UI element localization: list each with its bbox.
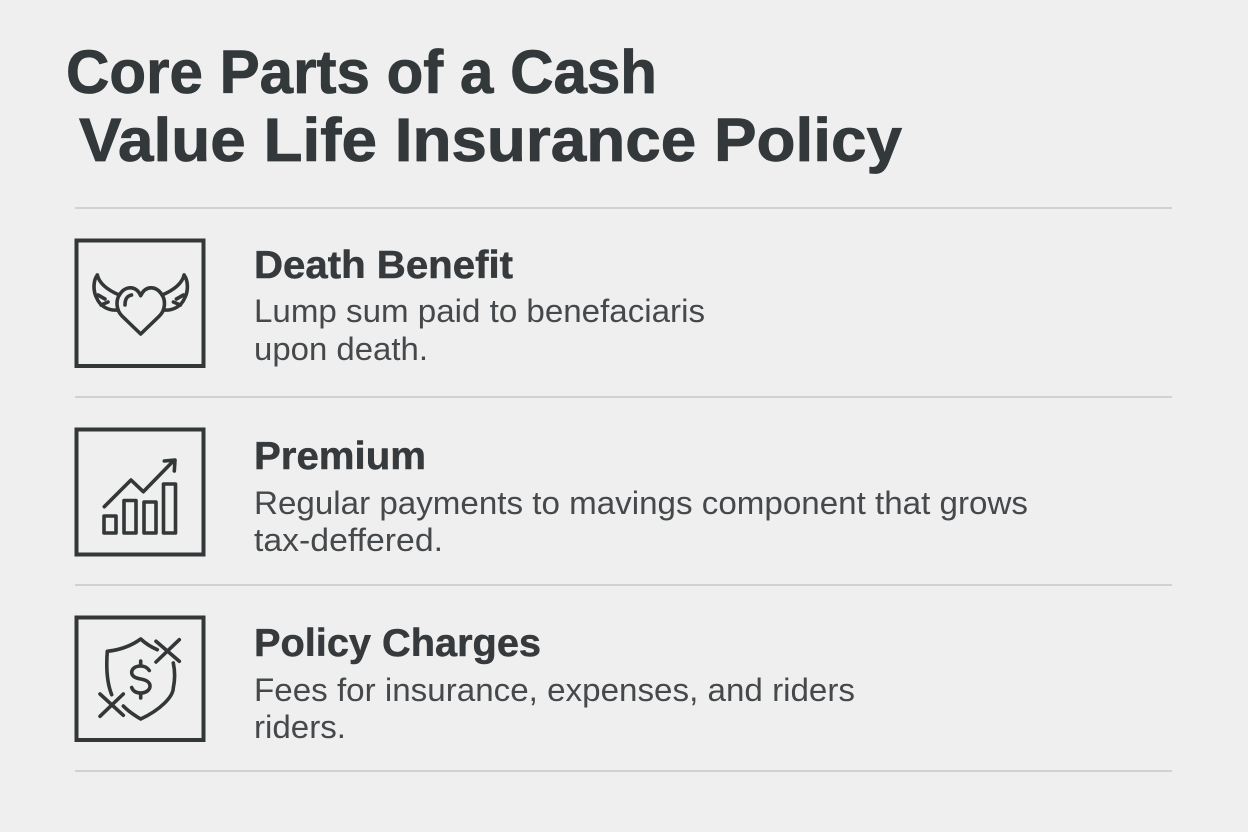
text: premium description: tax-deffered.: [254, 522, 443, 558]
title: Core Parts of a Cash: [66, 38, 657, 106]
text: policy charges description: riders.: [254, 709, 346, 745]
text: death benefit description: [254, 293, 705, 367]
panel: policy charges: [76, 618, 855, 745]
heading: death benefit: Death Benefit: [254, 244, 513, 287]
panel: death benefit: [76, 240, 705, 367]
text: policy charges description: Fees for insurance, expenses, and riders: [254, 672, 855, 708]
icon: winged heart: [76, 240, 204, 366]
heading: premium: Premium: [254, 435, 426, 478]
text: premium description: [254, 485, 1028, 558]
text: policy charges description: [254, 672, 855, 745]
title: Value Life Insurance Policy: [79, 106, 902, 174]
text: death benefit description: upon death.: [254, 331, 428, 367]
text: death benefit description: Lump sum paid to benefaciaris: [254, 293, 705, 329]
icon: growth chart: [76, 430, 204, 554]
title: [66, 38, 902, 174]
icon: shield with dollar and crosses: [76, 618, 204, 740]
heading: policy charges: Policy Charges: [254, 622, 541, 665]
panel: premium: [76, 430, 1028, 558]
text: premium description: Regular payments to mavings component that grows: [254, 485, 1028, 521]
